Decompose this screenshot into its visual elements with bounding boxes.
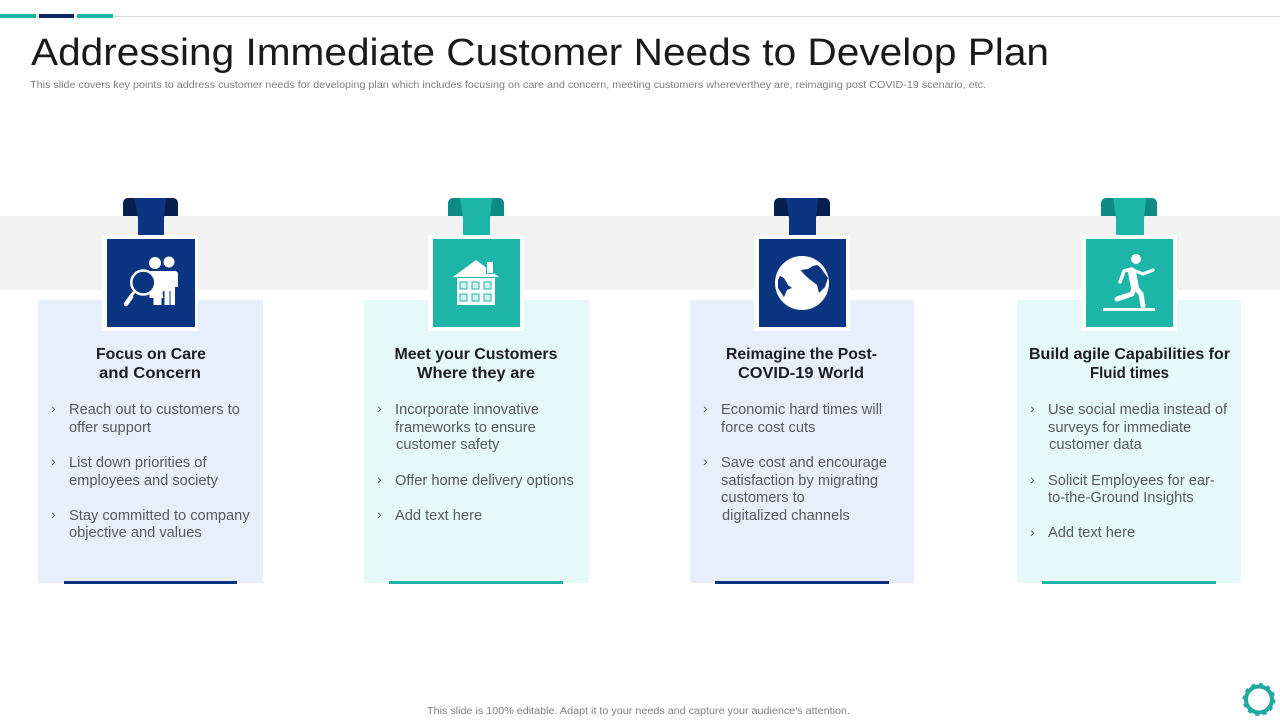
heading — [96, 346, 206, 382]
panel: focus on care and concern — [38, 198, 263, 584]
bullet list: Incorporate innovative — [395, 402, 539, 418]
heading: Meet your Customers — [394, 346, 558, 363]
heading — [394, 346, 558, 382]
heading: Build agile Capabilities for — [1029, 346, 1230, 363]
bullet list: employees and society — [69, 473, 219, 489]
bullet list: Save cost and encourage — [721, 455, 887, 471]
hanger tab — [123, 198, 178, 236]
bullet list: Economic hard times will — [721, 402, 882, 418]
card bottom bar — [715, 581, 889, 584]
bullet list: customers to — [721, 490, 805, 506]
bullet list: customer safety — [396, 437, 500, 453]
heading: COVID-19 World — [738, 365, 864, 382]
bullet list: › — [1030, 400, 1035, 416]
bullet list: Stay committed to company — [69, 508, 250, 524]
bullet list: to-the-Ground Insights — [1048, 490, 1194, 506]
bullet list: › — [51, 453, 56, 469]
bullet list: › — [377, 506, 382, 522]
hanger tab — [448, 198, 504, 236]
bullet list: › — [1030, 524, 1035, 540]
bullet list: Offer home delivery options — [395, 473, 574, 489]
bullet list: Add text here — [1048, 525, 1135, 541]
heading — [1029, 346, 1230, 382]
icon: running person — [1081, 235, 1177, 331]
bullet list: › — [703, 400, 708, 416]
bullet list: › — [51, 400, 56, 416]
card background — [1017, 300, 1241, 583]
card bottom bar — [389, 581, 563, 584]
subtitle: This slide covers key points to address customer needs for developing plan which includes focusing on care and concern, meeting customers whereverthey are, reimaging post COVID-19 scenario, etc. — [30, 80, 986, 91]
bullet list: customer data — [1049, 437, 1143, 453]
heading: Reimagine the Post- — [726, 346, 877, 363]
bullet list — [377, 400, 574, 524]
bullet list: List down priorities of — [69, 455, 207, 471]
bullet list: › — [703, 453, 708, 469]
bullet list: Solicit Employees for ear- — [1048, 473, 1215, 489]
card bottom bar — [64, 581, 237, 584]
card background — [38, 300, 263, 583]
bullet list: Add text here — [395, 508, 482, 524]
bullet list: objective and values — [69, 525, 202, 541]
heading: Where they are — [417, 365, 535, 382]
bullet list — [51, 400, 250, 541]
icon: house — [428, 235, 524, 331]
top accent bar — [0, 14, 1280, 18]
bullet list: satisfaction by migrating — [721, 473, 878, 489]
bullet list: › — [1030, 471, 1035, 487]
hanger tab — [774, 198, 830, 236]
hanger tab — [1101, 198, 1157, 236]
bullet list: › — [377, 471, 382, 487]
bullet list: force cost cuts — [721, 420, 815, 436]
panel: reimagine the post-covid world — [690, 198, 914, 584]
icon: gear — [1244, 684, 1274, 714]
bullet list — [703, 400, 887, 524]
bullet list: › — [377, 400, 382, 416]
card bottom bar — [1042, 581, 1216, 584]
bullet list: Reach out to customers to — [69, 402, 240, 418]
panel: meet your customers — [364, 198, 589, 584]
bullet list — [1030, 400, 1228, 541]
bullet list: › — [51, 506, 56, 522]
title: Addressing Immediate Customer Needs to Develop Plan — [31, 32, 1049, 74]
bullet list: frameworks to ensure — [395, 420, 536, 436]
bullet list: Use social media instead of — [1048, 402, 1228, 418]
bullet list: surveys for immediate — [1048, 420, 1191, 436]
heading: Fluid times — [1090, 365, 1169, 382]
card background — [364, 300, 589, 583]
heading: and Concern — [99, 365, 201, 382]
bullet list: offer support — [69, 420, 151, 436]
icon: people with magnifier — [102, 235, 198, 331]
footer note: This slide is 100% editable. Adapt it to your needs and capture your audience's attention. — [427, 706, 850, 717]
bullet list: digitalized channels — [722, 508, 850, 524]
panel: build agile capabilities — [1017, 198, 1241, 584]
heading — [726, 346, 877, 382]
grey background band — [0, 216, 1280, 290]
card background — [690, 300, 914, 583]
icon: globe — [754, 235, 850, 331]
heading: Focus on Care — [96, 346, 206, 363]
